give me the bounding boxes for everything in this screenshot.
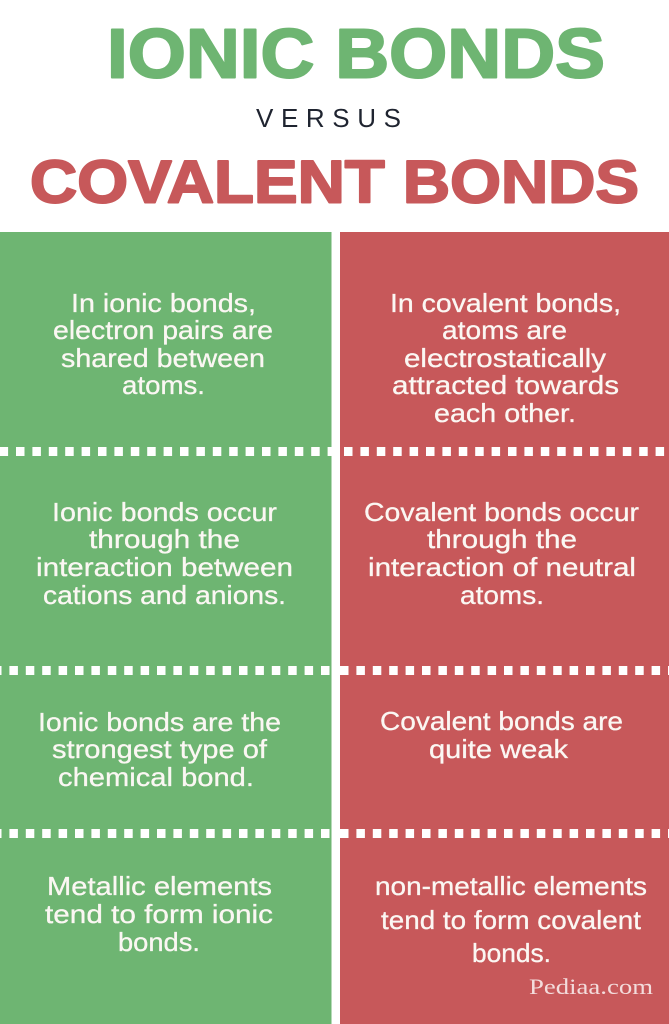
text: covalent attraction: electrostatically [404,343,606,373]
text: ionic cations and anions: through the [89,524,240,554]
text: ionic electron pairs: In ionic bonds, [71,288,256,318]
text: covalent strength [380,706,623,764]
text: ionic electron pairs [53,288,273,400]
text: covalent neutral atoms: Covalent bonds occur [364,497,639,527]
panel: ionic bonds column [0,232,332,1024]
text: ionic strength: Ionic bonds are the [38,707,281,737]
text: ionic cations and anions [36,497,293,610]
text: non-metallic elements: non-metallic elements [375,871,647,901]
heading: versus: VERSUS [256,103,401,133]
text: covalent neutral atoms [364,497,639,610]
title [30,14,639,216]
text: metallic elements: tend to form ionic [45,899,273,929]
text: ionic cations and anions: Ionic bonds occur [52,497,277,527]
text: metallic elements [45,871,273,957]
panel: covalent bonds column [340,232,669,1024]
text: non-metallic elements: bonds. [472,938,551,968]
text: ionic strength: strongest type of [52,734,268,764]
text: metallic elements: Metallic elements [47,871,272,901]
text: covalent attraction: each other. [434,398,576,428]
text: non-metallic elements: tend to form covalent [381,905,642,935]
text: ionic strength: chemical bond. [58,762,254,792]
text: covalent attraction: In covalent bonds, [390,288,621,318]
text: covalent neutral atoms: atoms. [460,580,544,610]
text: ionic strength [38,707,281,792]
text: ionic cations and anions: cations and anions. [43,580,286,610]
text: covalent strength: quite weak [429,734,569,764]
heading: ionic bonds: IONIC BONDS [107,14,605,92]
text: covalent attraction [390,288,621,428]
text: covalent attraction: atoms are [442,315,567,345]
text: covalent strength: Covalent bonds are [380,706,623,736]
text: ionic electron pairs: electron pairs are [53,315,273,345]
text: non-metallic elements [375,871,647,968]
text: covalent attraction: attracted towards [392,370,619,400]
text: covalent neutral atoms: through the [427,524,577,554]
heading: covalent bonds: COVALENT BONDS [30,148,639,216]
text: ionic electron pairs: shared between [61,343,265,373]
text: ionic cations and anions: interaction between [36,552,293,582]
text: covalent neutral atoms: interaction of neutral [368,552,636,582]
text: metallic elements: bonds. [118,927,200,957]
watermark: Pediaa.com: Pediaa.com [529,974,653,999]
text: ionic electron pairs: atoms. [122,370,205,400]
